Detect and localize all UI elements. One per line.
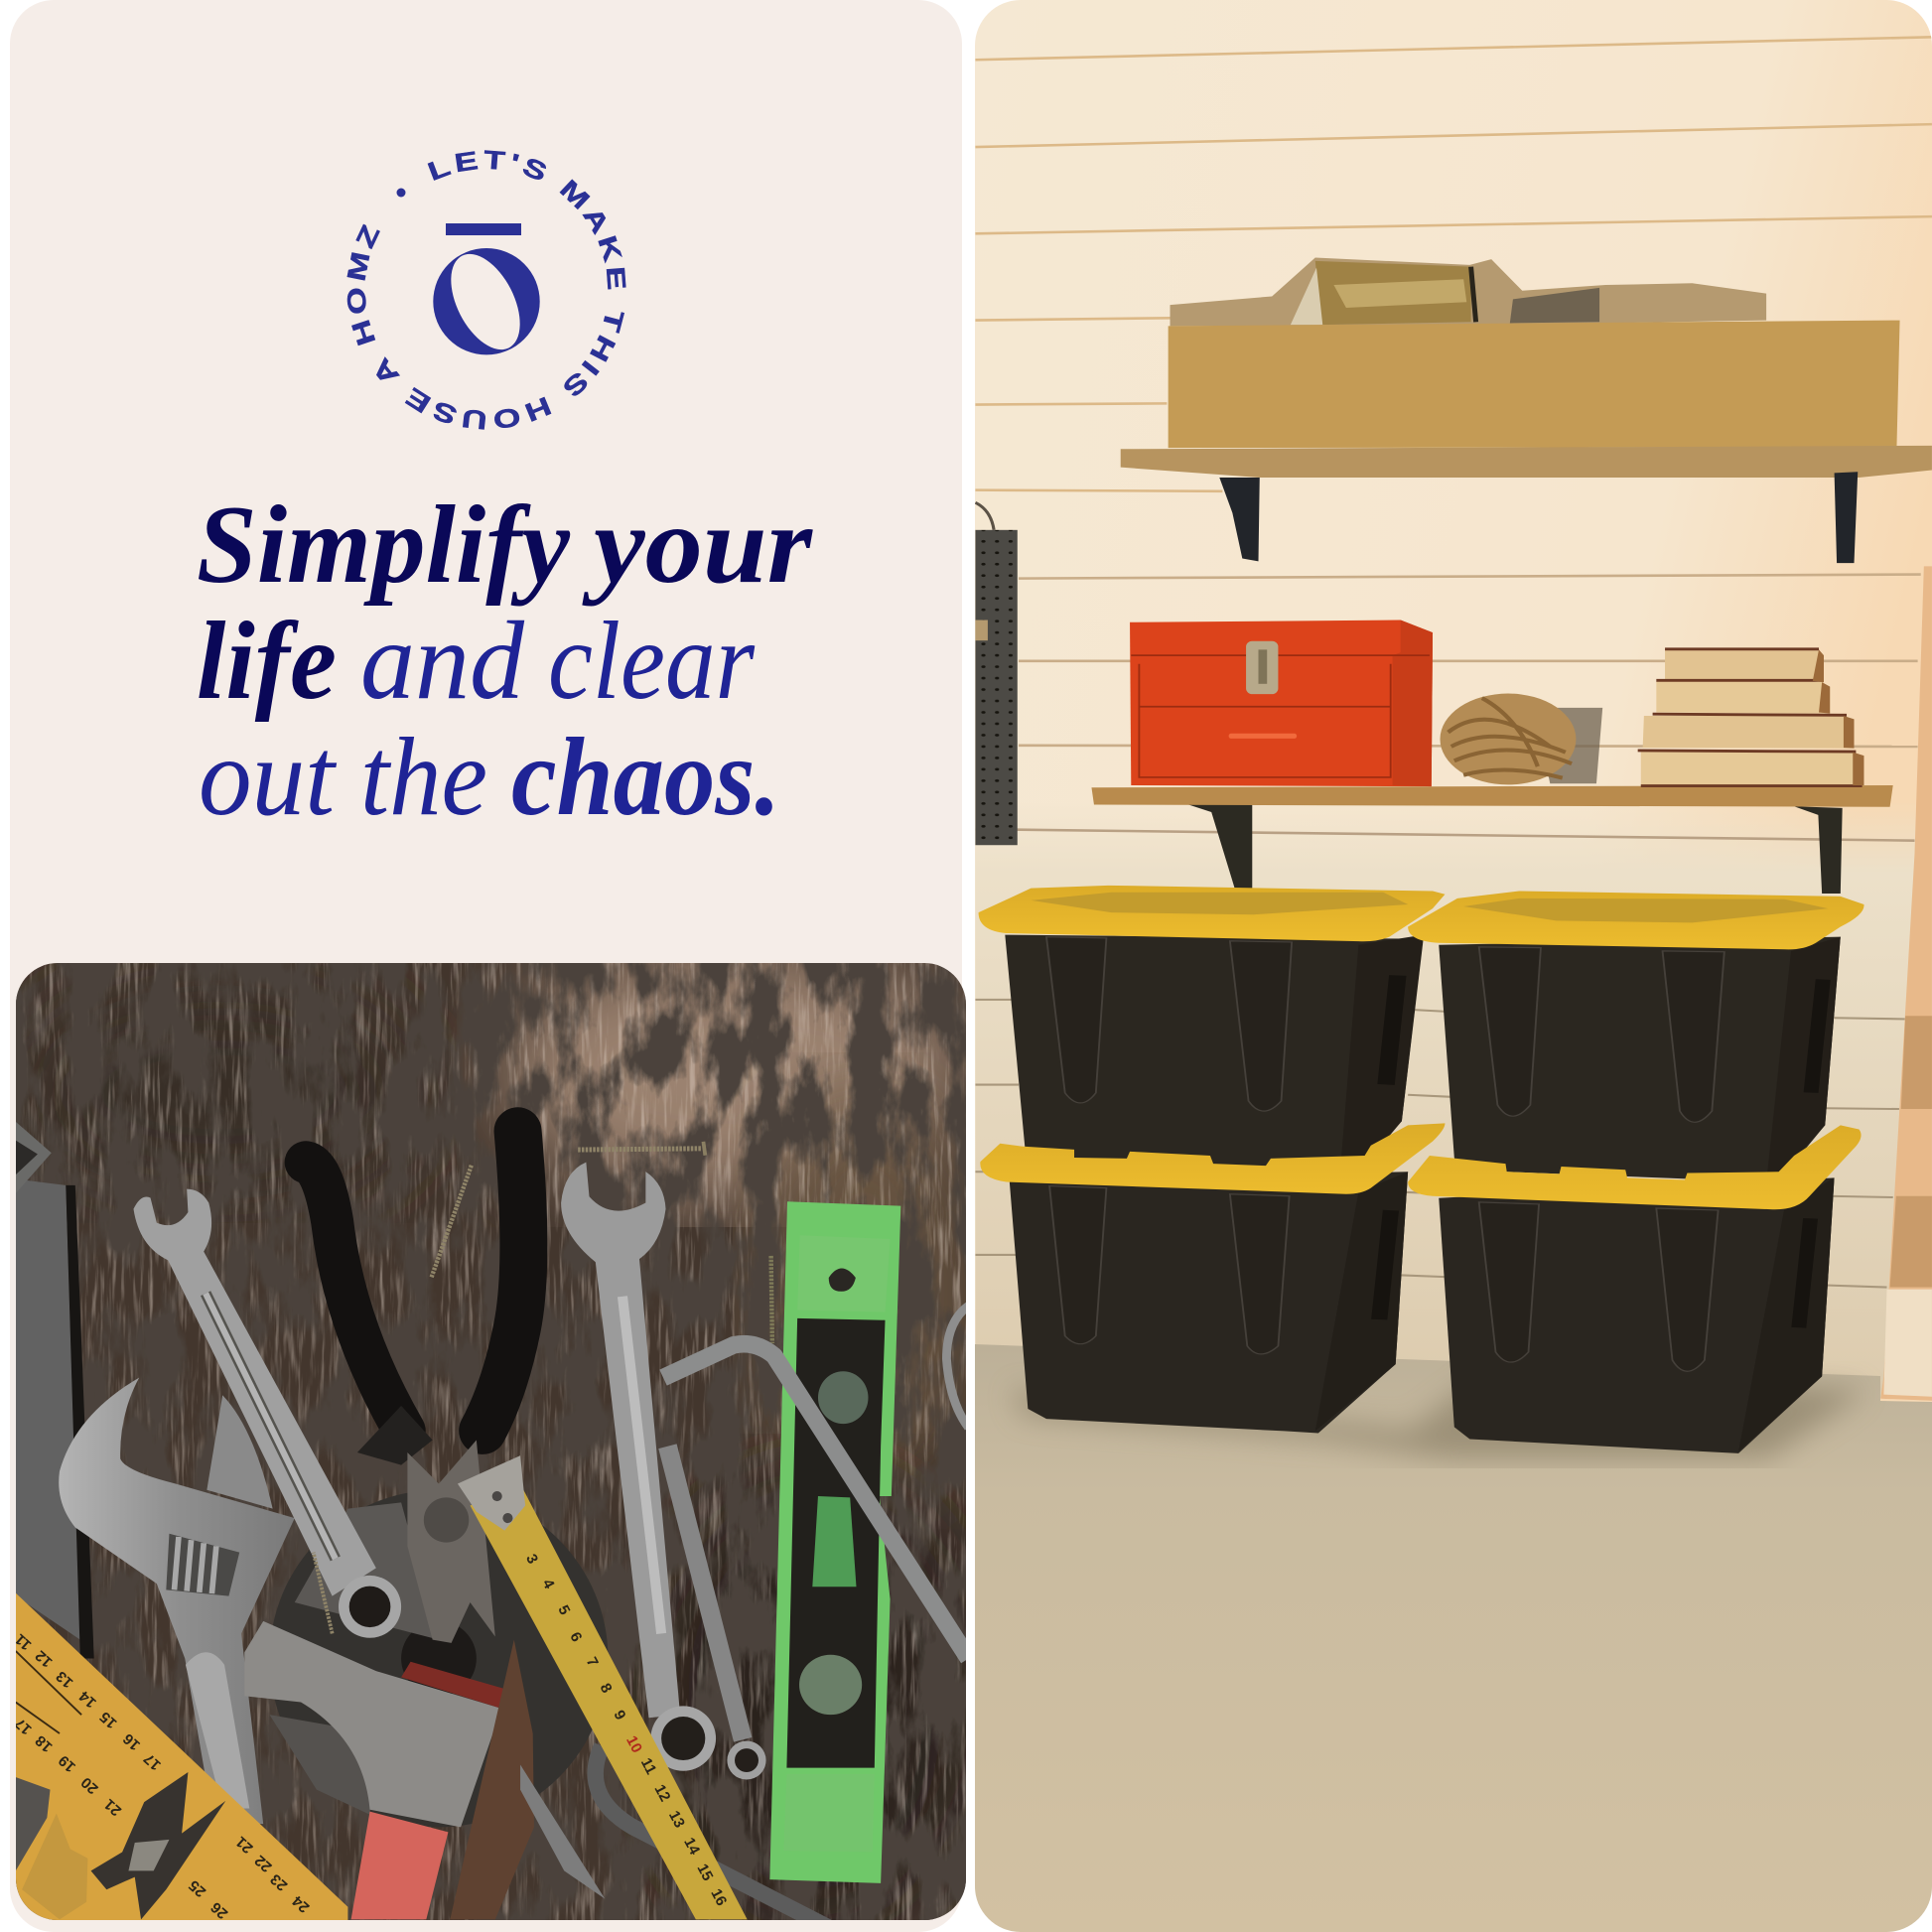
logo macron bar (446, 223, 521, 235)
heading: Simplify your life and clear out the chaos (197, 483, 813, 839)
heading: Simplify your life and clear out the chaos: Simplify (197, 483, 571, 607)
tape measure: 9 (611, 1708, 629, 1723)
wall slat lines (975, 37, 1932, 841)
tape measure: 12 (650, 1782, 673, 1805)
tape measure: 5 (554, 1602, 573, 1618)
folding ruler: 19 (56, 1751, 79, 1775)
allen key bottom (596, 1746, 827, 1927)
tape measure: 8 (597, 1681, 616, 1696)
folding ruler: 17 (12, 1715, 35, 1738)
stack of books (1638, 649, 1863, 786)
folding ruler: 23 (267, 1870, 291, 1894)
circular slogan text: LET'S MAKE THIS HOUSE A HOMZ (347, 150, 626, 430)
folding ruler: 25 (186, 1876, 209, 1900)
heading: Simplify your life and clear out the chaos: and (360, 600, 525, 723)
hammer (244, 1621, 507, 1919)
upper shelf (1121, 257, 1932, 563)
cardboard box (1169, 321, 1900, 448)
tape measure: 16 (707, 1886, 730, 1909)
folding ruler: 11 (12, 1630, 35, 1653)
wire basket (1535, 708, 1602, 783)
tape measure: 3 (522, 1552, 541, 1567)
folding ruler: 18 (32, 1731, 56, 1755)
pegboard (975, 502, 1018, 845)
folding ruler: 12 (32, 1647, 56, 1671)
yellow bit and metal clip (16, 1777, 87, 1919)
bin top left (979, 886, 1445, 1173)
lower shelf with objects (1091, 621, 1893, 894)
bin bottom right (1408, 1125, 1862, 1453)
tape measure: 6 (566, 1629, 585, 1645)
photo: garage storage wall (975, 0, 1932, 1932)
shelf bracket right (1835, 472, 1858, 563)
tape measure (458, 1455, 748, 1919)
concrete floor surface (975, 1344, 1932, 1932)
rope ball (1440, 694, 1576, 784)
folding ruler (12, 1593, 347, 1927)
saw blade (16, 1122, 94, 1659)
lower shelf bracket right (1794, 806, 1843, 894)
logo badge (347, 150, 626, 430)
red toolbox (1130, 621, 1433, 786)
heading: Simplify your life and clear out the chaos: the (360, 716, 487, 839)
green spirit level (769, 1201, 900, 1883)
heading: Simplify your life and clear out the chaos: life (197, 600, 337, 723)
spanner bottom piece (520, 1764, 605, 1899)
hand saw brown (450, 1640, 534, 1919)
folding ruler: 15 (96, 1708, 120, 1731)
lower wall slats (975, 566, 1932, 1401)
bin top right (1408, 892, 1864, 1181)
folding ruler: 20 (77, 1773, 101, 1797)
tape measure: 13 (665, 1808, 688, 1831)
storage bins (979, 886, 1864, 1453)
folding ruler: 14 (75, 1687, 99, 1712)
tape measure: 10 (622, 1733, 645, 1755)
tape measure: 7 (583, 1654, 602, 1670)
rusty small cutters (91, 1772, 225, 1919)
folding ruler: 22 (251, 1852, 275, 1875)
heading: Simplify your life and clear out the chaos: out (199, 716, 338, 839)
photo: tools on wooden table (12, 943, 983, 1932)
heading: Simplify your life and clear out the chaos: clear (548, 600, 755, 723)
combination wrench left (133, 1189, 401, 1638)
folding ruler: 21 (232, 1833, 256, 1857)
lower shelf bracket left (1188, 804, 1252, 889)
logo letter o (433, 243, 540, 360)
folding ruler: 21 (101, 1795, 125, 1819)
folding ruler: 24 (289, 1892, 313, 1916)
tape measure: 4 (539, 1577, 558, 1592)
panel: left cream card (10, 0, 962, 1932)
circular saw disc (270, 1490, 608, 1827)
shelf bracket left (1219, 478, 1260, 561)
shelf board (1091, 785, 1893, 807)
heading: Simplify your life and clear out the chaos: chaos. (511, 716, 780, 839)
screws (314, 1142, 772, 1633)
folding ruler: 26 (207, 1898, 231, 1922)
folding ruler: 16 (120, 1729, 144, 1753)
tape measure: 15 (693, 1862, 716, 1883)
tape measure: 11 (637, 1755, 659, 1777)
tape measure: 14 (680, 1835, 703, 1859)
adjustable wrench (59, 1378, 295, 1824)
small combination wrench (667, 1447, 766, 1780)
pliers black handles and jaws (306, 1131, 523, 1643)
allen key (663, 1344, 969, 1659)
ring at right edge (946, 1306, 969, 1428)
wrapped items on top of the box (1171, 257, 1766, 326)
shelf board (1121, 446, 1932, 478)
combination wrench right (561, 1163, 716, 1771)
folding ruler: 13 (53, 1668, 76, 1691)
folding ruler: 17 (141, 1750, 165, 1773)
logo separator dot (397, 189, 405, 197)
bin bottom left (980, 1123, 1445, 1433)
heading: Simplify your life and clear out the chaos: your (582, 483, 813, 607)
shadow under bins (1013, 1370, 1866, 1459)
